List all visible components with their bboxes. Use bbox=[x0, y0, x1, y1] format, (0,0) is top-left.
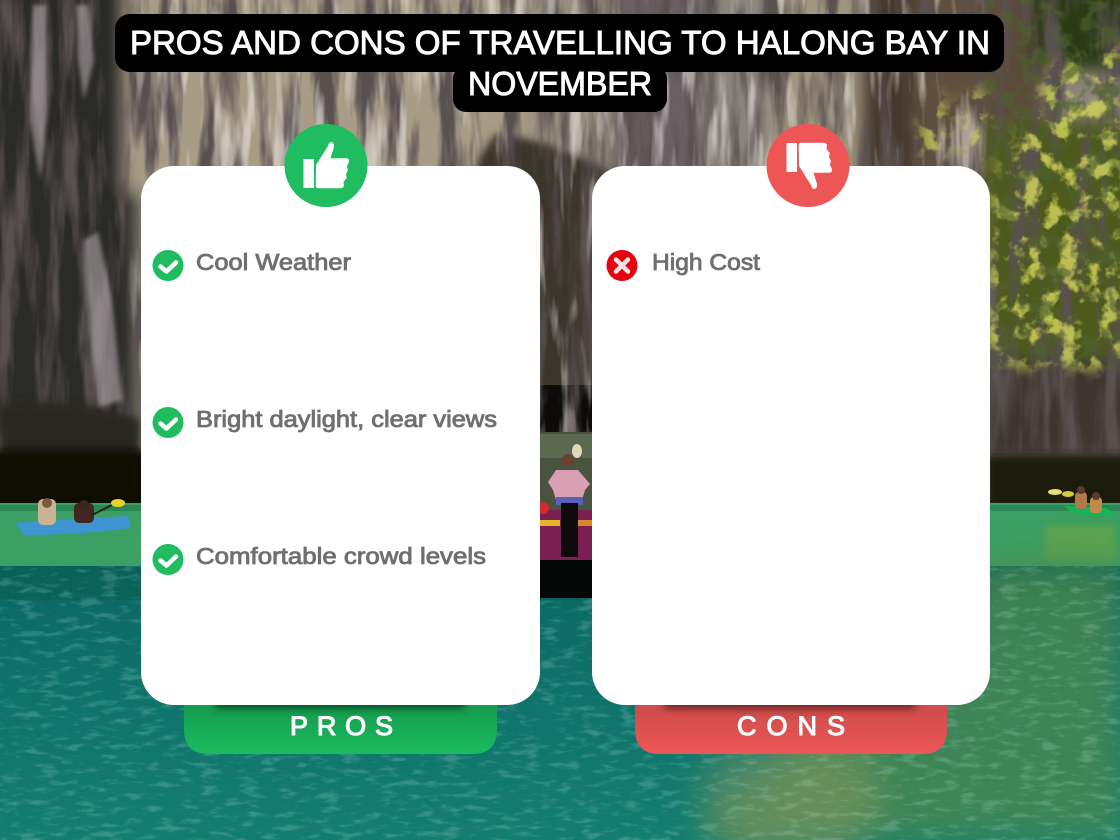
tab label: pros: PROS bbox=[290, 711, 393, 741]
icon: check bbox=[152, 250, 184, 281]
kayak: left bbox=[15, 498, 131, 535]
panel: pros bbox=[141, 124, 540, 705]
panel: cons bbox=[592, 124, 990, 705]
tab: pros bbox=[184, 705, 497, 754]
title: PROS AND CONS OF TRAVELLING TO HALONG BAY IN bbox=[130, 24, 990, 61]
tab: cons bbox=[635, 705, 947, 754]
item: cool weather bbox=[152, 249, 351, 281]
tab label: cons: CONS bbox=[737, 711, 845, 741]
label: High Cost bbox=[652, 249, 761, 275]
pale streaks on left cliff bbox=[30, 5, 122, 408]
item: comfortable crowd levels bbox=[152, 543, 486, 575]
label: Bright daylight, clear views bbox=[196, 406, 497, 432]
boat with tourists in cave bbox=[537, 432, 594, 560]
kayak: right bbox=[1048, 486, 1118, 516]
item: bright daylight bbox=[152, 406, 497, 438]
icon: thumbs down bbox=[766, 124, 850, 207]
icon: cross bbox=[606, 250, 638, 281]
icon: thumbs up bbox=[284, 124, 368, 207]
label: Comfortable crowd levels bbox=[196, 543, 486, 569]
label: Cool Weather bbox=[196, 249, 351, 275]
title bbox=[115, 14, 1004, 112]
icon: check bbox=[152, 544, 184, 575]
icon: check bbox=[152, 407, 184, 438]
title: NOVEMBER bbox=[468, 65, 652, 102]
item: high cost bbox=[606, 249, 761, 281]
cave arch bbox=[471, 128, 612, 386]
